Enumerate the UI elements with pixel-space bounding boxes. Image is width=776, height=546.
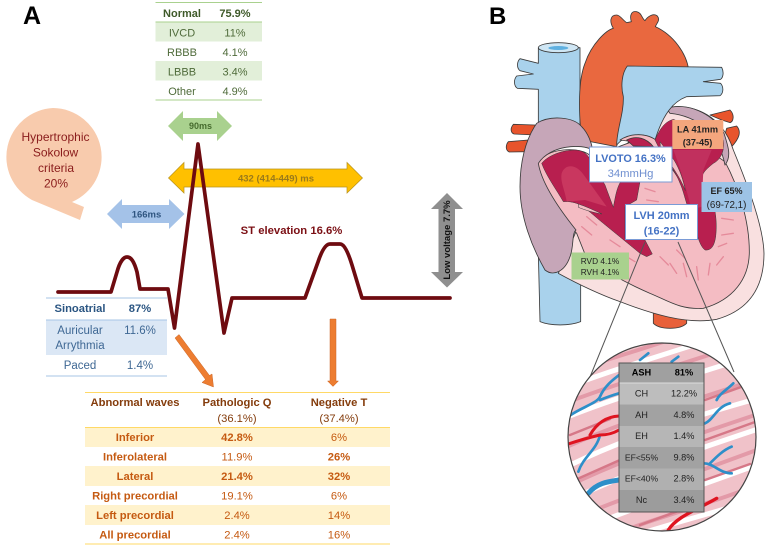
pulmonary veins right (710, 110, 739, 147)
label: EF (702, 182, 752, 212)
myocardial striations (582, 188, 733, 280)
label: EF: (69-72,1) (707, 200, 746, 211)
table: hypertrophy subtypes: 3.4% (674, 495, 694, 505)
right atrium (520, 118, 593, 273)
table: abnormal waves: Inferolateral (103, 452, 167, 464)
table: abnormal waves: 26% (328, 452, 350, 464)
table: abnormal waves: All precordial (99, 530, 171, 542)
table: abnormal waves: 16% (328, 530, 350, 542)
left atrium roof (667, 106, 729, 165)
pulmonary artery (617, 66, 723, 145)
label: RVD and RVH (572, 252, 629, 280)
table: QRS morphology: 4.1% (222, 47, 248, 59)
superior vena cava (514, 43, 580, 133)
red vessels (568, 416, 717, 530)
table: hypertrophy subtypes (619, 363, 704, 512)
arrow: QRS 90ms: 90ms (189, 121, 212, 131)
pulmonary veins left (506, 124, 535, 152)
table: abnormal waves (85, 392, 390, 544)
table: QRS morphology: Other (168, 86, 196, 98)
arrow: QRS 90ms (168, 111, 232, 141)
table: abnormal waves: Pathologic Q (202, 397, 272, 409)
panel label A: A (23, 2, 41, 30)
table: hypertrophy subtypes: EF<40% (625, 474, 658, 484)
label: LVH: (16-22) (644, 226, 680, 238)
callout: Hypertrophic Sokolow criteria: criteria (38, 161, 74, 175)
callout: Hypertrophic Sokolow criteria: 20% (44, 176, 68, 190)
table: hypertrophy subtypes: EH (635, 431, 648, 441)
callout: Hypertrophic Sokolow criteria: Hypertrophic (21, 130, 90, 144)
table: hypertrophy subtypes: CH (635, 388, 648, 398)
table: hypertrophy subtypes: ASH (632, 368, 652, 378)
label: LVOTO: 34mmHg (608, 168, 653, 180)
tricuspid leaflet (578, 204, 602, 214)
arrow: low voltage: Low voltage 7.7% (442, 200, 453, 280)
arrow: to negative T (328, 319, 338, 386)
arrow: low voltage (431, 193, 463, 288)
table: abnormal waves: Abnormal waves (91, 397, 179, 409)
muscle fibres (568, 344, 756, 530)
table: abnormal waves: 11.9% (222, 452, 252, 464)
table: abnormal waves: (36.1%) (217, 413, 257, 425)
descending aorta (653, 307, 687, 328)
table: hypertrophy subtypes: AH (635, 410, 648, 420)
label: LA (672, 120, 723, 149)
table: hypertrophy subtypes: 1.4% (674, 431, 694, 441)
arrow: to pathologic Q (175, 334, 214, 387)
table: abnormal waves: 6% (331, 432, 347, 444)
table: QRS morphology: 3.4% (222, 66, 248, 78)
blue vessels (571, 353, 733, 493)
table: atrial rhythm: 87% (129, 303, 151, 315)
label: LVH: LVH 20mm (633, 210, 690, 222)
table: hypertrophy subtypes: 2.8% (674, 474, 694, 484)
right ventricle cavity (542, 150, 652, 257)
table: abnormal waves: (37.4%) (319, 413, 359, 425)
label: EF: EF 65% (710, 186, 743, 196)
table: abnormal waves: 2.4% (224, 510, 250, 522)
table: QRS morphology: 4.9% (222, 86, 248, 98)
table: abnormal waves: Inferior (116, 432, 155, 444)
callout: Hypertrophic Sokolow criteria: Sokolow (33, 146, 79, 160)
panel label B: B (489, 3, 506, 30)
table: atrial rhythm: 11.6% (124, 325, 156, 337)
callout: Hypertrophic Sokolow criteria (6, 108, 102, 220)
label: LVOTO: LVOTO 16.3% (595, 153, 666, 165)
table: abnormal waves: 14% (328, 510, 350, 522)
table: hypertrophy subtypes: 81% (675, 368, 693, 378)
table: hypertrophy subtypes: 12.2% (671, 388, 697, 398)
table: QRS morphology: Normal (163, 8, 201, 20)
table: atrial rhythm: Auricular (57, 325, 103, 337)
label: LA: LA 41mm (677, 124, 718, 134)
ST elevation label: ST elevation 16.6% (241, 225, 342, 237)
table: abnormal waves: 42.8% (221, 432, 253, 444)
table: abnormal waves: Negative T (311, 397, 367, 409)
ECG trace (58, 144, 450, 333)
table: abnormal waves: Lateral (117, 471, 153, 483)
table: hypertrophy subtypes: 9.8% (674, 452, 694, 462)
table: QRS morphology: IVCD (169, 28, 195, 40)
table: abnormal waves: Left precordial (96, 510, 174, 522)
mitral leaflet (660, 142, 685, 191)
aortic arch (579, 12, 689, 147)
table: QRS morphology: LBBB (168, 66, 196, 78)
table: abnormal waves: 19.1% (221, 490, 253, 502)
label: LA: (37-45) (683, 138, 712, 148)
table: hypertrophy subtypes: Nc (636, 495, 648, 505)
table: abnormal waves: 6% (331, 490, 347, 502)
table: abnormal waves: 21.4% (221, 471, 253, 483)
left ventricle cavity (655, 119, 724, 250)
label: RVD and RVH: RVH 4.1% (581, 267, 620, 277)
table: atrial rhythm (46, 298, 167, 376)
table: QRS morphology: 11% (224, 28, 246, 40)
table: hypertrophy subtypes: EF<55% (625, 452, 658, 462)
heart illustration (506, 12, 764, 328)
inferior vena cava (538, 253, 581, 325)
label: LVH (626, 204, 698, 240)
table: QRS morphology (156, 2, 262, 100)
table: QRS morphology: RBBB (167, 47, 197, 59)
table: abnormal waves: 2.4% (224, 530, 250, 542)
arrow: PR 166ms (107, 199, 184, 229)
magnified myocardium circle (567, 342, 757, 532)
aortic valve chamber (620, 135, 685, 190)
table: QRS morphology: 75.9% (219, 8, 251, 20)
arrow: QT 432 ms (168, 162, 362, 193)
table: atrial rhythm: Arrythmia (55, 340, 105, 352)
connector lines to zoomed muscle (590, 242, 734, 377)
label: RVD and RVH: RVD 4.1% (581, 256, 620, 266)
table: abnormal waves: 32% (328, 471, 350, 483)
table: atrial rhythm: Sinoatrial (55, 303, 105, 315)
right ventricle highlight (561, 166, 607, 207)
table: hypertrophy subtypes: 4.8% (674, 410, 694, 420)
table: abnormal waves: Right precordial (92, 490, 178, 502)
label: LVOTO (590, 147, 672, 182)
arrow: PR 166ms: 166ms (132, 210, 161, 220)
outer heart wall (558, 107, 764, 321)
table: atrial rhythm: Paced (64, 360, 96, 372)
myocardium (537, 133, 749, 309)
table: atrial rhythm: 1.4% (127, 360, 153, 372)
arrow: QT 432 ms: 432 (414-449) ms (238, 174, 314, 184)
